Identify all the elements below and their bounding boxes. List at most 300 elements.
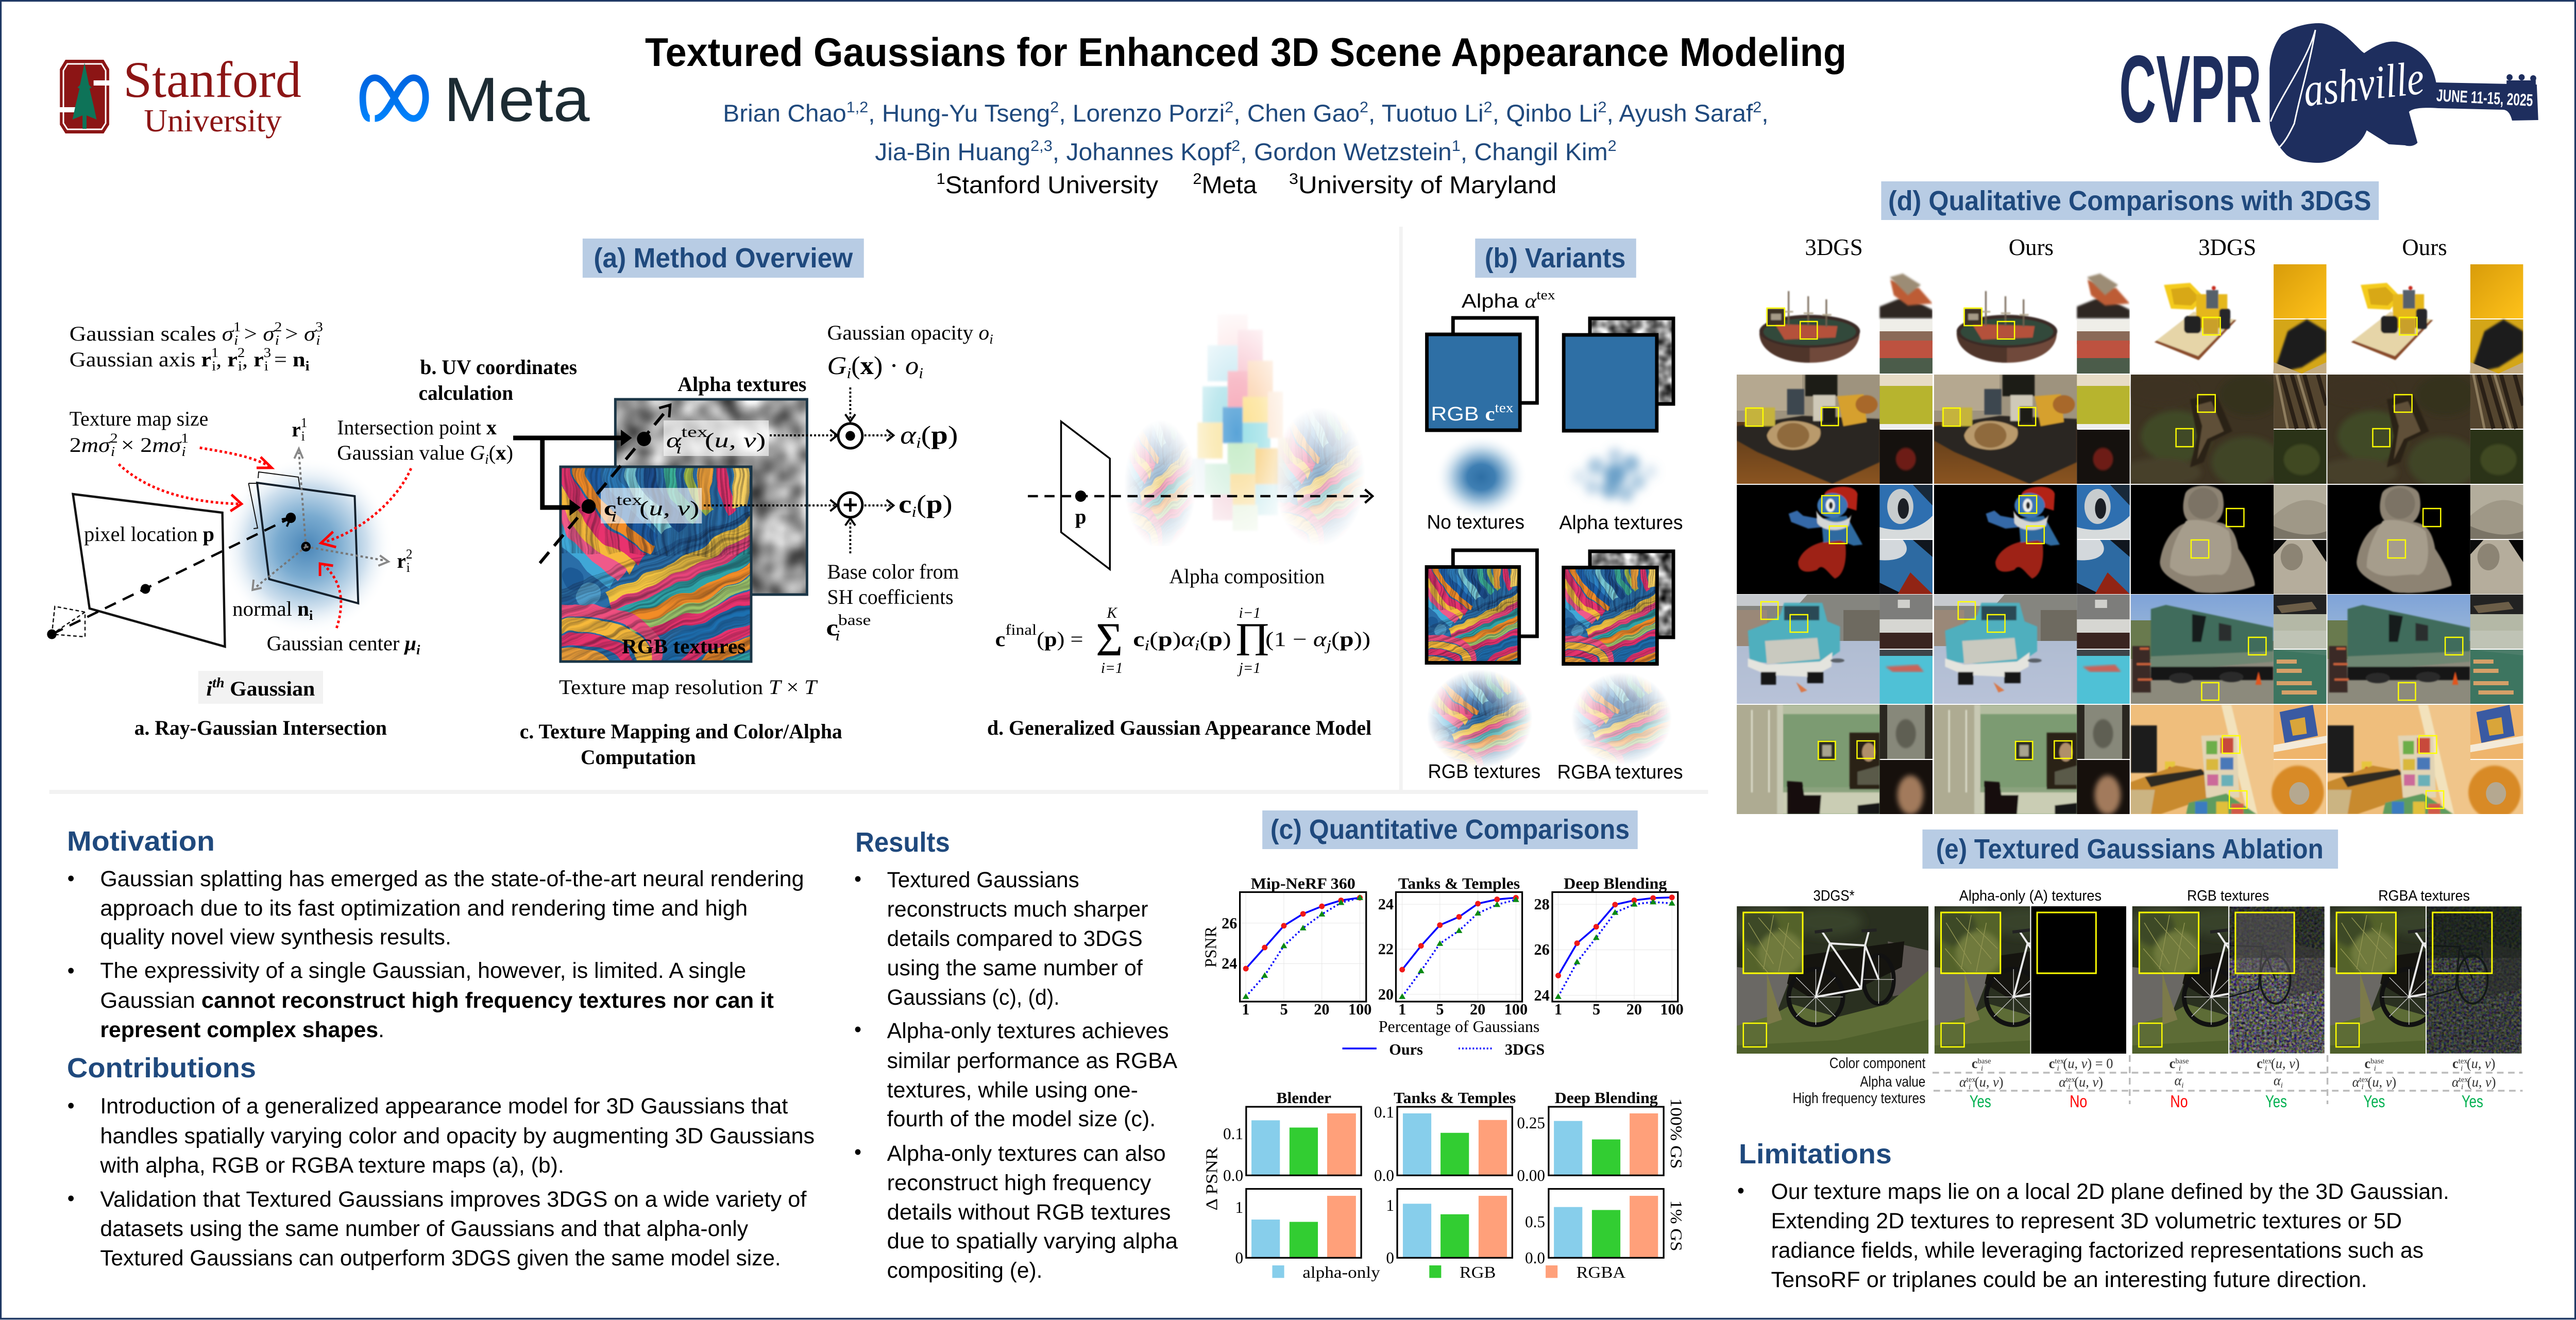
line charts: PSNR vs percentage of Gaussians: 20 <box>1470 1001 1485 1018</box>
text: gaussian scales and axis: r <box>253 348 264 371</box>
logo: Stanford University <box>59 52 301 139</box>
label: alpha: Alpha α <box>1462 290 1535 312</box>
arrows: intersection into textures <box>513 405 670 563</box>
texture: RGB map: ( <box>639 497 649 520</box>
logo: CVPR Nashville guitar: JUNE 11-15, 2025 <box>2436 86 2533 110</box>
text block: contributions: Introduction of a generalized appearance model for 3D Gaussians that <box>100 1094 788 1119</box>
bar charts: delta PSNR: RGBA <box>1577 1263 1625 1281</box>
line charts: PSNR vs percentage of Gaussians: PSNR <box>1202 926 1219 968</box>
affiliations: 1 <box>936 171 945 188</box>
text: gaussian scales and axis: Gaussian axis r <box>70 348 210 371</box>
variant card: RGBA textures: RGBA textures <box>1557 761 1683 783</box>
variant card: no textures: No textures <box>1427 511 1524 533</box>
table: component comparison: i <box>2374 1064 2376 1073</box>
text block: contributions: datasets using the same number of Gaussians and that alpha-only <box>100 1217 749 1241</box>
panel: (c) quantitative comparisons <box>1202 810 1685 1281</box>
bar charts: delta PSNR: 0.0 <box>1223 1166 1243 1184</box>
table: component comparison: α <box>2352 1074 2360 1090</box>
text: gaussian scales and axis: 1 <box>211 345 218 360</box>
text block: results: compositing (e). <box>887 1259 1042 1283</box>
image row: plush toy and buddha <box>1737 485 2523 594</box>
bar charts: delta PSNR: 0 <box>1386 1249 1394 1267</box>
text block: contributions: Textured Gaussians can outperform 3DGS given the same model size. <box>100 1246 781 1271</box>
texture: RGB map <box>502 462 872 767</box>
line charts: PSNR vs percentage of Gaussians: 100 <box>1504 1001 1528 1018</box>
text: appearance terms: α <box>900 420 917 449</box>
table: component comparison: c <box>2365 1056 2370 1071</box>
text: texture map size <box>70 408 208 459</box>
caption: d. generalized appearance model: d. Generalized Gaussian Appearance Model <box>987 717 1371 739</box>
authors: Brian Chao <box>723 100 841 127</box>
bar charts: delta PSNR: 100% GS <box>1667 1098 1685 1169</box>
axis labels and callouts: 1 <box>301 415 307 430</box>
line charts: PSNR vs percentage of Gaussians: 5 <box>1592 1001 1600 1018</box>
authors: , Tuotuo Li <box>1368 100 1484 127</box>
axis labels and callouts: Gaussian center μ <box>267 632 416 655</box>
authors: 2 <box>1608 138 1617 155</box>
text: gaussian scales and axis: i <box>275 333 279 348</box>
equation: final colour: i <box>1195 637 1199 653</box>
axis labels and callouts: Intersection point x <box>337 416 497 439</box>
text block: contributions <box>67 1053 815 1271</box>
affiliations <box>936 171 1556 198</box>
operators and dotted flows <box>704 387 893 553</box>
text block: limitations <box>1738 1139 2449 1292</box>
column headers: 3DGS* <box>1814 888 1855 904</box>
text block: results: Results <box>855 827 950 858</box>
text: appearance terms: c <box>899 489 911 518</box>
table: component comparison: base <box>2175 1057 2189 1065</box>
text: gaussian scales and axis: i <box>234 333 238 348</box>
authors: 2 <box>1050 99 1059 116</box>
title: Textured Gaussians for Enhanced 3D Scene Appearance Modeling <box>645 30 1846 75</box>
variant card: RGB textures <box>1425 548 1540 778</box>
line charts: PSNR vs percentage of Gaussians: 1 <box>1398 1001 1406 1018</box>
texture: RGB map: u, v ) <box>649 497 697 520</box>
variant card: no textures <box>1427 318 1537 533</box>
label: i-th Gaussian: i <box>206 678 212 700</box>
text: texture map size: 1 <box>181 431 189 446</box>
axis labels and callouts: r <box>397 550 406 572</box>
line charts: PSNR vs percentage of Gaussians: 20 <box>1626 1001 1642 1018</box>
caption: a. ray-Gaussian intersection: a. Ray-Gaussian Intersection <box>134 717 387 739</box>
caption: b. UV coordinates: calculation <box>418 382 513 404</box>
equation: final colour: c <box>1133 628 1144 651</box>
line charts: PSNR vs percentage of Gaussians: Deep Blending <box>1564 875 1667 892</box>
column headers <box>1805 234 2447 260</box>
text: appearance terms: ( <box>921 420 931 449</box>
text: appearance terms: Texture map resolution T × T <box>559 676 818 699</box>
table: component comparison: base <box>2370 1057 2384 1065</box>
text block: limitations: radiance fields, while leveraging factorized representations such as <box>1771 1239 2424 1263</box>
label: i-th Gaussian: Gaussian <box>225 678 315 700</box>
table: component comparison <box>1792 1055 2522 1111</box>
panel: (b) variants <box>1394 239 1741 824</box>
texture: alpha map: u, v ) <box>715 429 763 452</box>
bar charts: delta PSNR: alpha-only <box>1302 1263 1380 1281</box>
text: appearance terms: i <box>835 628 840 644</box>
column headers: Ours <box>2402 234 2447 260</box>
text: texture map size: 2mσ <box>70 434 106 456</box>
authors: 2,3 <box>1030 138 1053 155</box>
text block: results: using the same number of <box>887 956 1143 980</box>
line charts: PSNR vs percentage of Gaussians: 1 <box>1554 1001 1562 1018</box>
text block: results: Alpha-only textures achieves <box>887 1019 1169 1043</box>
heading: (c) quantitative comparisons: (c) Quantitative Comparisons <box>1270 814 1630 845</box>
table: component comparison: (u, v) <box>2467 1056 2495 1071</box>
table: component comparison: (u, v) <box>1975 1074 2003 1090</box>
table: component comparison: c <box>2257 1056 2263 1071</box>
text: gaussian scales and axis: > <box>238 323 263 345</box>
caption: b. UV coordinates <box>418 356 577 404</box>
image: alpha-only split <box>1929 906 2126 1054</box>
table: component comparison: Yes <box>2363 1092 2385 1111</box>
caption: c. texture mapping <box>520 720 842 769</box>
equation: final colour: ( <box>1199 628 1208 651</box>
label: alpha: tex <box>1536 287 1555 302</box>
line charts: PSNR vs percentage of Gaussians <box>1202 875 1684 1058</box>
equation: final colour: j=1 <box>1237 660 1261 676</box>
authors: , <box>1761 100 1769 127</box>
table: component comparison: α <box>2059 1074 2066 1090</box>
text: appearance terms: base <box>838 612 871 629</box>
affiliations: Stanford University <box>945 172 1159 198</box>
text: appearance terms: i <box>989 332 993 347</box>
text: gaussian scales and axis: 2 <box>275 319 282 334</box>
table: component comparison: (u, v) <box>2271 1056 2300 1071</box>
axis labels and callouts <box>84 415 513 657</box>
authors: 2 <box>1484 99 1493 116</box>
table: component comparison: tex <box>1967 1076 1976 1084</box>
table: component comparison: High frequency textures <box>1792 1090 1925 1107</box>
caption: b. UV coordinates: b. UV coordinates <box>420 356 577 379</box>
table: component comparison: i <box>1969 1083 1971 1091</box>
table: component comparison: i <box>2461 1064 2463 1073</box>
table: component comparison: (u, v) <box>2074 1074 2103 1090</box>
authors: Jia-Bin Huang <box>875 139 1023 165</box>
axis labels and callouts: i <box>301 429 305 444</box>
line charts: PSNR vs percentage of Gaussians: 5 <box>1280 1001 1288 1018</box>
line charts: PSNR vs percentage of Gaussians: 1 <box>1242 1001 1250 1018</box>
table: component comparison: tex <box>2359 1076 2369 1084</box>
table: component comparison: α <box>2274 1073 2281 1088</box>
axis labels and callouts: normal n <box>232 598 309 620</box>
equation: final colour: i−1 <box>1239 605 1261 621</box>
text block: limitations: Our texture maps lie on a local 2D plane defined by the 3D Gaussian. <box>1771 1180 2449 1204</box>
authors: , Qinbo Li <box>1493 100 1598 127</box>
text block: results: Gaussians (c), (d). <box>887 986 1060 1010</box>
image: 3DGS bicycle <box>1732 906 1928 1054</box>
bar charts: delta PSNR: 0.0 <box>1525 1249 1545 1267</box>
text: gaussian scales and axis: > <box>279 323 304 345</box>
text block: results: Textured Gaussians <box>887 868 1079 892</box>
logo: Meta: Meta <box>444 64 590 134</box>
text: gaussian scales and axis: 3 <box>264 345 271 360</box>
authors: , Johannes Kopf <box>1053 139 1231 165</box>
text: texture map size: × 2 <box>115 434 152 456</box>
equation: final colour: ( <box>1149 628 1158 651</box>
bar charts: delta PSNR: Deep Blending <box>1555 1089 1658 1107</box>
line charts: PSNR vs percentage of Gaussians: 26 <box>1222 915 1237 932</box>
table: component comparison: c <box>2452 1056 2459 1071</box>
equation: final colour: p)α <box>1158 628 1192 651</box>
table: component comparison: tex <box>2263 1057 2272 1065</box>
authors: , Lorenzo Porzi <box>1059 100 1225 127</box>
text: gaussian scales and axis: Gaussian scales σ <box>70 323 232 345</box>
bar charts: delta PSNR: 0.1 <box>1374 1103 1394 1121</box>
text: gaussian scales and axis: i <box>316 333 320 348</box>
equation: final colour: i <box>1144 637 1149 653</box>
text: appearance terms: SH coefficients <box>827 586 954 608</box>
label: i-th Gaussian <box>198 671 323 704</box>
text block: motivation: quality novel view synthesis results. <box>100 925 451 950</box>
texture: RGB map: i <box>611 509 617 524</box>
table: component comparison: Yes <box>2462 1092 2483 1111</box>
variant card: no textures: tex <box>1495 400 1514 415</box>
text: gaussian scales and axis: 2 <box>238 345 245 360</box>
column headers: Alpha-only (A) textures <box>1959 888 2102 904</box>
equation: final colour: Σ <box>1096 613 1123 666</box>
label: i-th Gaussian: th <box>212 675 225 690</box>
line charts: PSNR vs percentage of Gaussians: Mip-NeRF 360 <box>1251 875 1355 892</box>
heading: (d) qualitative comparisons: (d) Qualitative Comparisons with 3DGS <box>1888 185 2371 216</box>
logo: CVPR Nashville guitar: ashville <box>2301 51 2427 116</box>
heading: (e) ablation: (e) Textured Gaussians Ablation <box>1936 834 2324 865</box>
text: appearance terms: x) · o <box>860 351 918 380</box>
axis labels and callouts: 2 <box>406 547 413 562</box>
column headers: Ours <box>2009 234 2054 260</box>
text: appearance terms: i <box>919 365 923 382</box>
text block: results: due to spatially varying alpha <box>887 1229 1178 1254</box>
authors: 2 <box>1598 99 1606 116</box>
line charts: PSNR vs percentage of Gaussians: 100 <box>1348 1001 1371 1018</box>
column headers: 3DGS <box>2198 234 2256 260</box>
bar charts: delta PSNR: 0.0 <box>1374 1166 1394 1184</box>
bar charts: delta PSNR: 0.00 <box>1517 1166 1545 1184</box>
table: component comparison: i <box>2068 1083 2070 1091</box>
text: gaussian scales and axis <box>70 319 323 374</box>
table: component comparison: No <box>2070 1092 2087 1111</box>
diagram: alpha composition <box>1028 320 1375 587</box>
table: component comparison: Yes <box>1970 1092 1991 1111</box>
text: gaussian scales and axis: 1 <box>233 319 241 334</box>
table: component comparison: Alpha value <box>1860 1074 1925 1090</box>
text block: results: textures, while using one- <box>887 1078 1138 1103</box>
bar charts: delta PSNR: Tanks & Temples <box>1394 1089 1516 1107</box>
column headers: RGB textures <box>2187 888 2269 904</box>
text block: contributions: with alpha, RGB or RGBA texture maps (a), (b). <box>99 1154 564 1178</box>
column headers: RGBA textures <box>2378 888 2470 904</box>
column headers <box>1814 888 2470 904</box>
authors: , Hung-Yu Tseng <box>868 100 1050 127</box>
bar charts: delta PSNR: Δ PSNR <box>1203 1146 1221 1210</box>
table: component comparison: c <box>2170 1056 2175 1071</box>
equation: final colour: i=1 <box>1101 660 1123 676</box>
axis labels and callouts: i <box>416 642 420 657</box>
text: gaussian scales and axis: i <box>264 359 268 374</box>
logo: Stanford University: Stanford <box>123 52 301 108</box>
table: component comparison: i <box>2265 1064 2267 1073</box>
axis labels and callouts: r <box>292 418 301 441</box>
text block: results: fourth of the model size (c). <box>887 1107 1156 1131</box>
bar charts: delta PSNR: 1 <box>1386 1196 1394 1214</box>
text block: motivation: represent complex shapes. <box>100 1018 384 1042</box>
text: gaussian scales and axis: n <box>293 348 306 371</box>
authors: 2 <box>1360 99 1368 116</box>
text block: contributions: handles spatially varying color and opacity by augmenting 3D Gaussians <box>100 1124 815 1148</box>
table: component comparison: i <box>2461 1083 2463 1091</box>
logo: Stanford University: University <box>144 103 282 139</box>
logo: Meta <box>363 64 590 134</box>
texture: RGB map: RGB textures <box>622 635 745 658</box>
image row: green room and playroom <box>1737 705 2523 819</box>
text: appearance terms: c <box>826 616 838 640</box>
authors: 2 <box>1231 138 1240 155</box>
equation: final colour: ( <box>1331 628 1340 651</box>
text block: limitations: Limitations <box>1739 1139 1892 1170</box>
line charts: PSNR vs percentage of Gaussians: 24 <box>1222 955 1237 972</box>
axis labels and callouts: i <box>406 560 410 575</box>
authors: , Gordon Wetzstein <box>1240 139 1452 165</box>
text block: results: Alpha-only textures can also <box>887 1142 1166 1166</box>
authors: , Chen Gao <box>1233 100 1360 127</box>
authors: 2 <box>1753 99 1761 116</box>
logo: CVPR Nashville guitar <box>2119 23 2538 163</box>
text block: contributions: Contributions <box>67 1053 256 1084</box>
table: component comparison: (u, v) <box>2368 1074 2396 1090</box>
variant card: alpha textures <box>1559 318 1683 533</box>
image row: truck and train <box>1737 595 2523 704</box>
bar charts: delta PSNR: Blender <box>1277 1089 1331 1107</box>
diagram: ray-Gaussian intersection <box>47 448 411 647</box>
bar charts: delta PSNR <box>1203 1089 1685 1281</box>
table: component comparison: i <box>2181 1081 2183 1090</box>
text: gaussian scales and axis: σ <box>304 323 316 345</box>
line charts: PSNR vs percentage of Gaussians: Ours <box>1389 1041 1423 1058</box>
table: component comparison: (u, v) = 0 <box>2063 1056 2113 1071</box>
text block: limitations: TensoRF or triplanes could be an interesting future direction. <box>1771 1268 2367 1292</box>
text: texture map size: Texture map size <box>70 408 208 430</box>
column headers: 3DGS <box>1805 234 1863 260</box>
variant card: RGBA textures <box>1559 549 1683 779</box>
text: appearance terms: p) <box>926 489 951 518</box>
text block: results: details compared to 3DGS <box>887 927 1143 951</box>
line charts: PSNR vs percentage of Gaussians: 24 <box>1534 987 1550 1004</box>
affiliations: Meta <box>1202 172 1257 198</box>
text block: motivation: The expressivity of a single Gaussian, however, is limited. A single <box>100 959 746 983</box>
table: component comparison: α <box>2452 1074 2460 1090</box>
table: component comparison: α <box>1959 1074 1967 1090</box>
affiliations: 3 <box>1289 171 1298 188</box>
image: RGB split <box>2127 906 2325 1054</box>
table: component comparison: i <box>2281 1081 2283 1090</box>
bar charts: delta PSNR: 1% GS <box>1667 1200 1685 1251</box>
text: texture map size: 2 <box>110 431 118 446</box>
text: gaussian scales and axis: = <box>268 348 293 371</box>
caption: c. texture mapping: Computation <box>581 746 696 769</box>
texture: alpha map: i <box>676 441 682 456</box>
table: component comparison: Color component <box>1829 1055 1925 1072</box>
text block: results: reconstructs much sharper <box>887 898 1148 922</box>
axis labels and callouts: ( <box>489 442 496 464</box>
line charts: PSNR vs percentage of Gaussians: 26 <box>1534 941 1550 958</box>
equation: final colour: j <box>1325 637 1331 653</box>
text: appearance terms: Gaussian opacity o <box>827 321 989 344</box>
text: gaussian scales and axis: , <box>216 348 227 371</box>
equation: final colour: K <box>1106 605 1118 621</box>
axis labels and callouts: i <box>309 608 313 623</box>
bar charts: delta PSNR: 0 <box>1235 1249 1243 1267</box>
line charts: PSNR vs percentage of Gaussians: 20 <box>1314 1001 1330 1018</box>
axis labels and callouts: Gaussian value G <box>337 442 484 464</box>
authors: 2 <box>1225 99 1233 116</box>
line charts: PSNR vs percentage of Gaussians: 28 <box>1534 895 1550 913</box>
text block: motivation: Gaussian splatting has emerged as the state-of-the-art neural rendering <box>100 867 804 891</box>
table: component comparison: c <box>2049 1056 2055 1071</box>
equation: final colour: c <box>995 628 1005 651</box>
text: texture map size: mσ <box>152 434 182 456</box>
equation: final colour: p) <box>1208 628 1229 651</box>
axis labels and callouts: x) <box>496 442 513 464</box>
table: component comparison: No <box>2170 1092 2188 1111</box>
line charts: PSNR vs percentage of Gaussians: Tanks & Temples <box>1398 875 1520 892</box>
caption: c. texture mapping: c. Texture Mapping and Color/Alpha <box>520 720 842 743</box>
text block: motivation: Gaussian cannot reconstruct high frequency textures nor can it <box>100 989 774 1013</box>
text: gaussian scales and axis: r <box>227 348 238 371</box>
texture: alpha map <box>615 399 807 595</box>
heading: (a) method overview: (a) Method Overview <box>594 243 853 274</box>
text: gaussian scales and axis: i <box>306 359 310 374</box>
affiliations: 2 <box>1193 171 1202 188</box>
authors: 1 <box>1452 138 1461 155</box>
text: texture map size: i <box>111 444 115 459</box>
text: gaussian scales and axis: 3 <box>315 319 323 334</box>
table: component comparison: tex <box>2055 1057 2064 1065</box>
affiliations: University of Maryland <box>1298 172 1556 198</box>
text: texture map size: i <box>181 444 186 459</box>
texture: alpha map: ( <box>705 429 715 452</box>
text: appearance terms <box>559 321 993 699</box>
image: RGBA split <box>2325 906 2522 1054</box>
bar charts: delta PSNR: RGB <box>1460 1263 1496 1281</box>
text: appearance terms: p) <box>931 420 956 449</box>
text block: limitations: Extending 2D textures to represent 3D volumetric textures or 5D <box>1771 1209 2402 1233</box>
variant card: RGB textures: RGB textures <box>1428 760 1540 782</box>
bar charts: delta PSNR: 1 <box>1235 1198 1243 1216</box>
line charts: PSNR vs percentage of Gaussians: 24 <box>1378 895 1394 913</box>
text block: motivation: approach due to its fast optimization and rendering time and high <box>100 896 748 921</box>
table: component comparison: Yes <box>2265 1092 2287 1111</box>
bar charts: delta PSNR: 0.1 <box>1223 1125 1243 1143</box>
line charts: PSNR vs percentage of Gaussians: 20 <box>1378 986 1394 1003</box>
bar charts: delta PSNR: 0.5 <box>1525 1213 1545 1231</box>
image row: kitchen and stump <box>1737 375 2523 488</box>
texture: RGB map: tex <box>616 492 642 509</box>
text block: motivation <box>67 826 804 1042</box>
table: component comparison: tex <box>2459 1076 2468 1084</box>
authors: , Ayush Saraf <box>1606 100 1753 127</box>
panel: (e) textured Gaussians ablation <box>1732 830 2522 1111</box>
panel: (a) method overview <box>47 239 1429 769</box>
text block: results: reconstruct high frequency <box>887 1171 1151 1195</box>
table: component comparison: i <box>1981 1064 1983 1073</box>
text block: results <box>855 827 1178 1283</box>
authors: 1,2 <box>846 99 868 116</box>
diagram: alpha composition: p <box>1075 505 1087 528</box>
equation: final colour: Π <box>1235 613 1269 666</box>
logo: CVPR Nashville guitar: CVPR <box>2119 36 2262 142</box>
line charts: PSNR vs percentage of Gaussians: 100 <box>1660 1001 1684 1018</box>
